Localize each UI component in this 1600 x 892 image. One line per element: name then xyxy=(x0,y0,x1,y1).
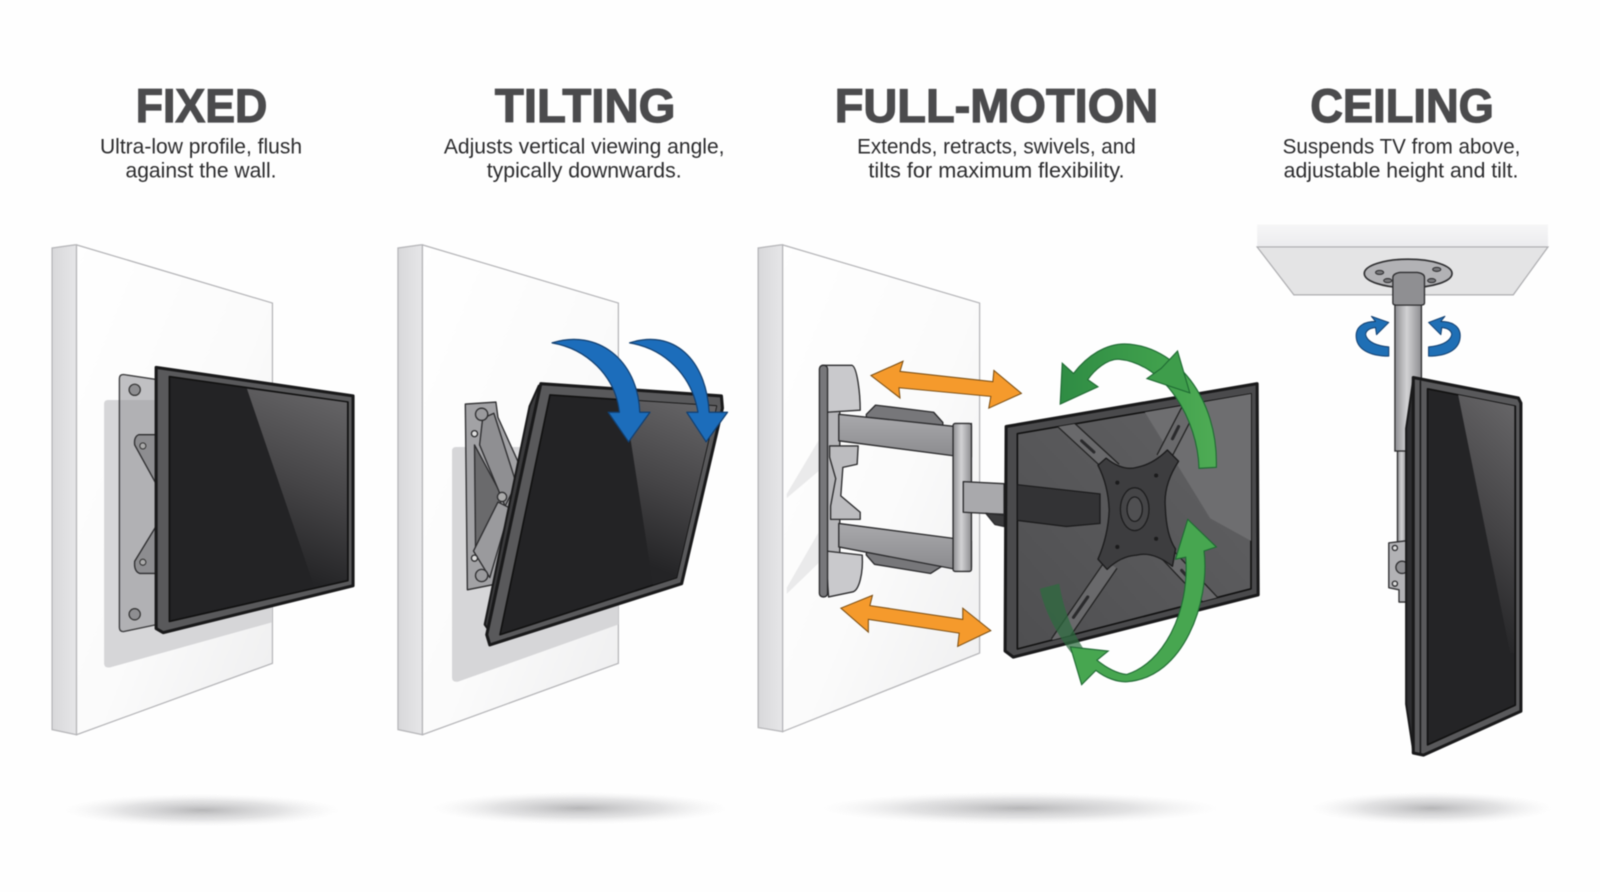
heading: fixed: FIXED xyxy=(136,80,267,133)
VESA plate and arms xyxy=(1057,403,1214,643)
wall xyxy=(52,245,272,735)
wall bracket xyxy=(119,374,157,632)
TV bracket xyxy=(1389,541,1408,602)
panel: ceiling mount xyxy=(1257,80,1548,755)
television: side view xyxy=(1406,378,1521,755)
heading: full-motion: FULL-MOTION xyxy=(835,80,1158,133)
television: rear view xyxy=(1005,384,1258,657)
extension arm behind TV xyxy=(1017,485,1100,527)
description: ceiling: adjustable height and tilt. xyxy=(1284,160,1518,183)
panel: fixed mount xyxy=(52,80,353,735)
description: full-motion: tilts for maximum flexibility. xyxy=(868,160,1124,183)
description: tilting: Adjusts vertical viewing angle, xyxy=(444,136,724,159)
description: fixed: against the wall. xyxy=(126,160,277,183)
description: fixed xyxy=(100,136,302,183)
tilt bracket xyxy=(465,402,522,590)
articulating arm xyxy=(819,365,1004,597)
green arrows: swivel and tilt xyxy=(1040,344,1216,685)
description: tilting: typically downwards. xyxy=(487,160,682,183)
floor shadow: full-motion xyxy=(821,792,1219,824)
arrows: tilt down xyxy=(552,339,728,442)
description: full-motion: Extends, retracts, swivels, and xyxy=(857,136,1136,159)
television: tilted xyxy=(485,384,722,645)
description: ceiling xyxy=(1283,136,1520,183)
description: tilting xyxy=(444,136,724,183)
wall xyxy=(758,245,980,732)
description: ceiling: Suspends TV from above, xyxy=(1283,136,1520,159)
mount shadow on wall xyxy=(104,400,271,668)
floor shadow: ceiling xyxy=(1311,792,1552,824)
mount shadow on wall xyxy=(452,447,618,682)
description: fixed: Ultra-low profile, flush xyxy=(100,136,302,159)
description: full-motion xyxy=(857,136,1136,183)
heading: tilting: TILTING xyxy=(495,80,676,133)
orange arrows: extend and retract xyxy=(841,361,1021,646)
ceiling plate xyxy=(1364,259,1452,288)
ceiling slab xyxy=(1257,224,1548,295)
floor shadow: fixed xyxy=(64,794,340,827)
heading: ceiling: CEILING xyxy=(1310,80,1494,133)
floor shadow: tilting xyxy=(432,792,728,824)
arrows: rotate xyxy=(1356,316,1460,356)
support pole xyxy=(1393,272,1424,543)
panel: tilting mount xyxy=(398,80,728,735)
television: fixed xyxy=(156,367,353,633)
wall xyxy=(398,245,618,735)
panel: full-motion mount xyxy=(758,80,1258,732)
